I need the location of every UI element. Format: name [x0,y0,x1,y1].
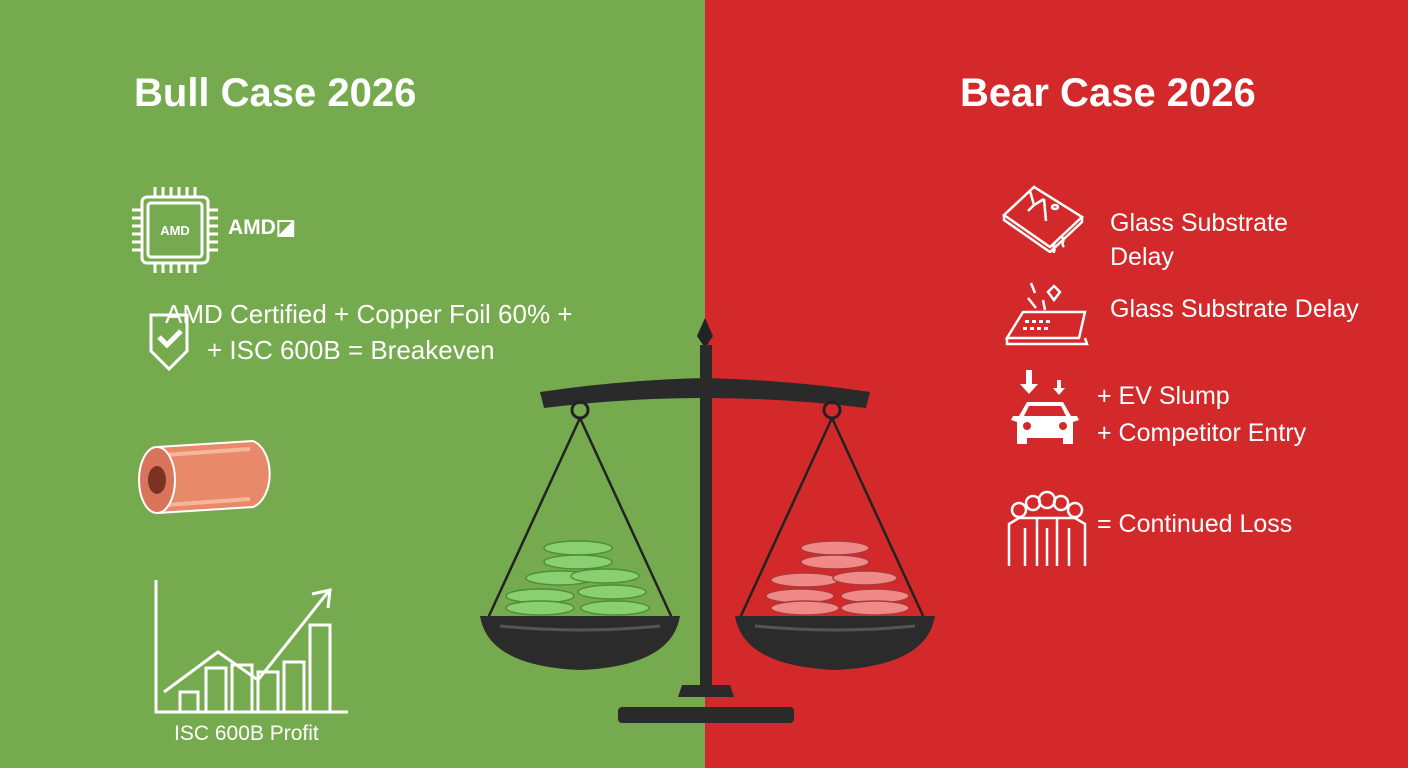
icon: car with arrows [1011,370,1079,444]
icon: AMD chip [132,187,218,273]
text: bull equation [165,299,573,365]
text: bull equation: AMD Certified + Copper Foil 60% + [165,299,573,329]
title: bull case: Bull Case 2026 [134,71,416,115]
text: ev slump: + Competitor Entry [1097,419,1306,447]
text: continued loss: = Continued Loss [1097,510,1292,538]
icon: copper foil roll [138,440,271,514]
title: bear case: Bear Case 2026 [960,71,1256,115]
text: glass substrate delay 1: Glass Substrate [1110,209,1288,237]
text: glass substrate delay 1 [1110,209,1288,271]
panel: bear background [705,0,1408,768]
icon: cracked glass [1002,185,1084,253]
icon: substrate panel [1004,282,1089,346]
icon: AMD chip: AMD [160,223,190,238]
text: bull equation: + ISC 600B = Breakeven [207,335,495,365]
text: ev slump: + EV Slump [1097,382,1230,410]
text: glass substrate delay 2: Glass Substrate Delay [1110,295,1359,323]
icon: balance scale [480,318,935,723]
text: glass substrate delay 1: Delay [1110,243,1174,271]
text: AMD logo: AMD◪ [228,216,296,239]
icon: people group [1008,490,1086,566]
chart: profit bars [154,580,348,714]
text: ev slump [1097,382,1306,447]
text: chart label: ISC 600B Profit [174,722,319,745]
icon: shield check [150,314,188,371]
panel: bull background [0,0,705,768]
